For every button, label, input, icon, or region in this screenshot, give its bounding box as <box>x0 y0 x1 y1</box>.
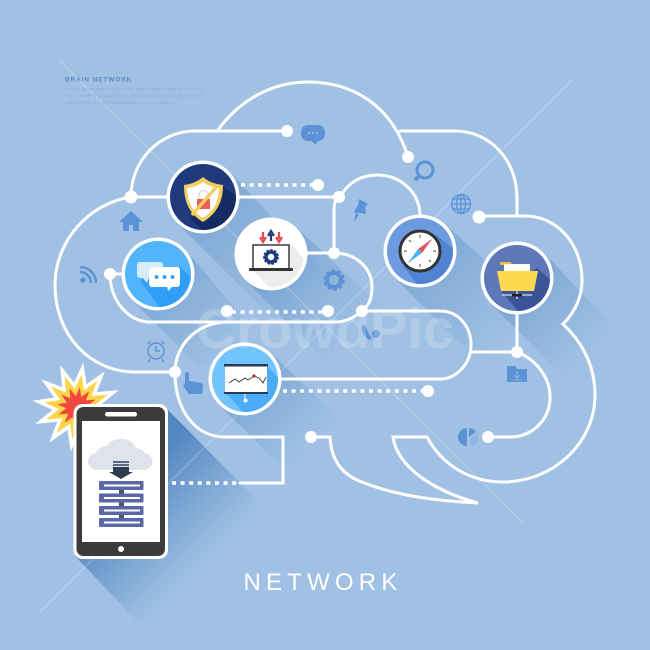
circle: chart <box>208 342 282 416</box>
body text: ei znl incident disputando at purto tacimates prid per ceterop <box>65 94 203 100</box>
connection nodes <box>104 125 523 443</box>
smartphone <box>74 404 168 559</box>
background diagonal light lines <box>40 60 572 612</box>
circle: compass <box>384 214 456 288</box>
icon: gear <box>324 270 344 290</box>
icon: rss <box>80 267 96 283</box>
icon: clock <box>148 341 164 362</box>
icon: download folder <box>507 366 527 382</box>
icon: phone <box>362 325 380 340</box>
icon: network folder <box>497 262 538 299</box>
body text <box>65 87 204 106</box>
icon: globe <box>452 194 470 214</box>
icon: pie chart <box>458 428 478 446</box>
icon: chat bubbles <box>137 262 180 291</box>
small icons <box>80 125 527 446</box>
heading: network: NETWORK <box>243 569 403 596</box>
icon: server stack <box>99 481 144 527</box>
icon: speech bubble <box>301 125 325 145</box>
circle: folder <box>480 242 556 316</box>
icon: laptop with gear <box>249 231 293 271</box>
dotted connectors <box>172 185 424 483</box>
icon: starburst <box>26 356 128 458</box>
body text: Lorem ipsum dolor sit amet no mutat tibique offendit eum sea <box>65 87 204 93</box>
icon: shield <box>184 177 223 222</box>
icon: search <box>415 162 433 180</box>
title: brain network: BRAIN NETWORK <box>65 76 132 84</box>
circle: shield <box>166 160 240 234</box>
icon: compass <box>400 231 440 271</box>
watermark: CrowdPic <box>196 297 454 360</box>
icon: cloud download <box>88 439 153 479</box>
icon: presentation board <box>224 364 268 402</box>
icon: pin <box>352 199 368 222</box>
icon: home <box>119 211 143 231</box>
circle: chat <box>122 238 194 310</box>
circle: laptop <box>234 218 308 292</box>
body text: rodessetea quo persuassalutatus an per discere <box>65 100 175 106</box>
network lines <box>55 82 595 503</box>
long shadows <box>75 171 622 640</box>
icon: hand <box>183 372 203 394</box>
